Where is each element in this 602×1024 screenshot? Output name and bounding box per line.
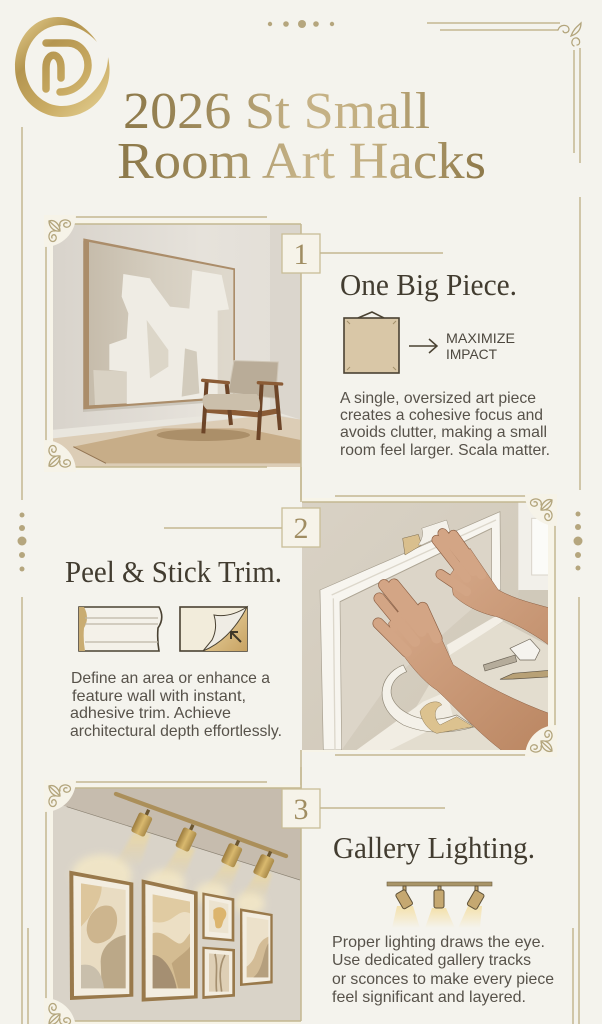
panel: step 3 image, gallery wall with track lights — [44, 767, 303, 1024]
label: maximize impact: IMPACT — [446, 346, 497, 362]
body text step 1: avoids clutter, making a small — [340, 424, 547, 441]
chair — [157, 361, 282, 441]
body text step 3: Use dedicated gallery tracks — [332, 952, 531, 969]
title: Room Art Hacks — [117, 133, 486, 190]
side dots left — [18, 512, 26, 572]
body text step 3: Proper lighting draws the eye. — [332, 934, 545, 951]
art piece — [83, 238, 235, 409]
top right corner frame — [427, 23, 581, 163]
side dots right — [574, 512, 582, 570]
label: maximize impact — [446, 330, 515, 362]
number box 2 — [164, 508, 320, 547]
body text step 2: feature wall with instant, — [72, 688, 246, 705]
number box 3: 3 — [294, 793, 308, 826]
heading: One Big Piece: One Big Piece. — [340, 267, 517, 302]
arrow — [409, 339, 437, 353]
heading: Peel and Stick Trim: Peel & Stick Trim. — [65, 554, 282, 589]
frame D — [202, 947, 235, 999]
icon: track light — [387, 882, 492, 928]
spot lights — [131, 807, 277, 879]
top dots ornament — [268, 20, 334, 28]
logo — [15, 17, 110, 117]
body text step 2 — [70, 670, 282, 740]
window — [518, 502, 548, 592]
body text step 3: or sconces to make every piece — [332, 971, 554, 988]
body text step 2: adhesive trim. Achieve — [70, 705, 231, 722]
peel corner — [403, 534, 422, 555]
floor table — [390, 622, 553, 752]
tape roll — [382, 665, 475, 733]
number box 1: 1 — [294, 238, 308, 271]
body text step 1 — [340, 390, 550, 459]
panel: step 2 image, hands applying trim — [300, 467, 557, 790]
body text step 3 — [332, 934, 554, 1006]
hand lower — [378, 584, 553, 752]
body text step 1: A single, oversized art piece — [340, 390, 536, 407]
icon: trim profile — [79, 607, 162, 651]
trim — [320, 512, 501, 750]
number box 1 — [282, 234, 443, 273]
label: maximize impact: MAXIMIZE — [446, 330, 515, 346]
tape measure and pencil — [483, 639, 553, 679]
body text step 2: Define an area or enhance a — [71, 670, 270, 687]
panel: step 1 image, room with oversized art and chair — [44, 215, 303, 500]
hand upper — [437, 533, 553, 648]
title — [117, 83, 486, 190]
light glow — [72, 833, 272, 915]
frame C — [202, 892, 234, 942]
icon: peel corner — [180, 607, 247, 651]
body text step 1: room feel larger. Scala matter. — [340, 442, 550, 459]
body text step 1: creates a cohesive focus and — [340, 407, 543, 424]
number box 2: 2 — [294, 512, 308, 545]
frame A — [69, 871, 133, 1000]
body text step 2: architectural depth effortlessly. — [70, 723, 282, 740]
number box 3 — [282, 789, 445, 828]
title: 2026 St Small — [123, 83, 430, 140]
icon: framed art piece — [344, 312, 399, 373]
heading: Gallery Lighting: Gallery Lighting. — [333, 830, 535, 865]
track — [116, 794, 286, 856]
frame E — [240, 908, 273, 986]
frame B — [142, 879, 198, 1002]
body text step 3: feel significant and layered. — [332, 989, 526, 1006]
